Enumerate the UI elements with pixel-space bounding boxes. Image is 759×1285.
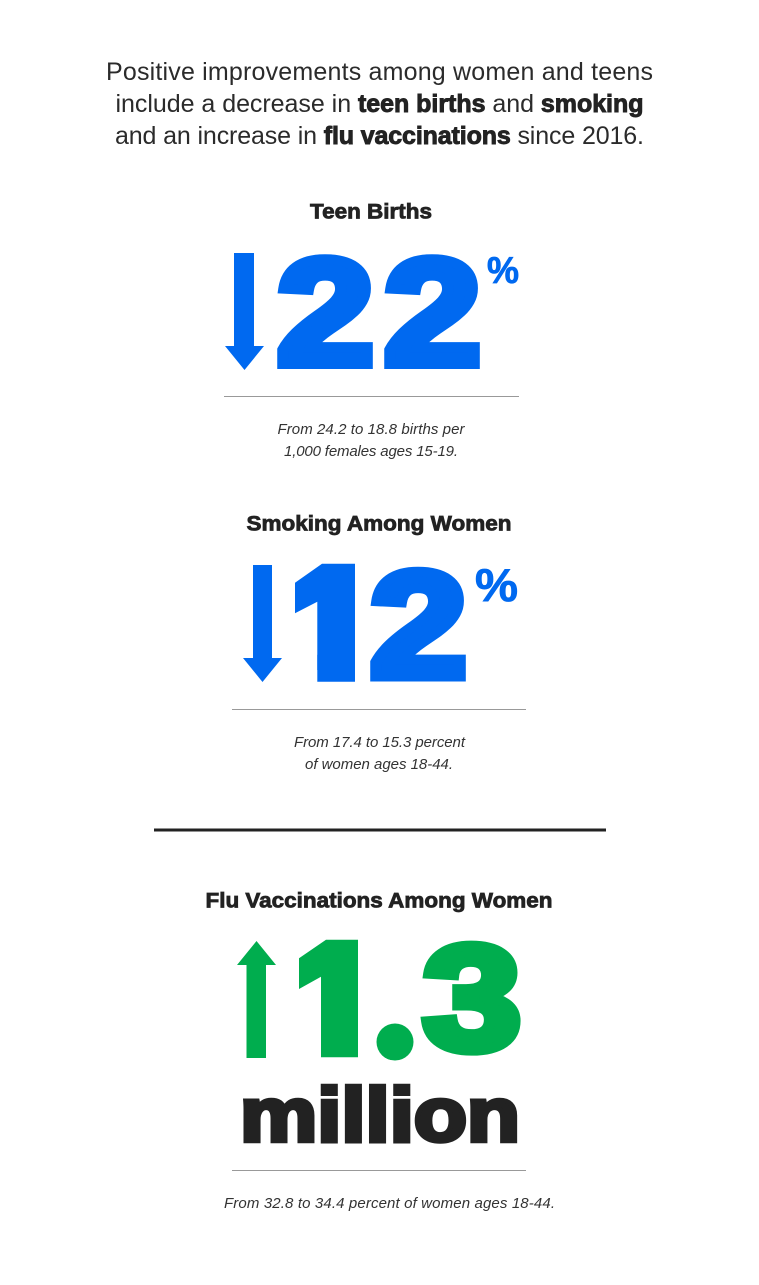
number: 12 percent: % xyxy=(475,559,518,611)
number: 12 percent xyxy=(295,564,518,682)
note: flu vaccinations: From 32.8 to 34.4 percent of women ages 18-44. xyxy=(224,1195,555,1212)
note: smoking: of women ages 18-44. xyxy=(305,756,453,773)
heading: teen births: Teen Births xyxy=(310,200,432,224)
note: smoking: From 17.4 to 15.3 percent xyxy=(294,734,466,751)
note: teen births: From 24.2 to 18.8 births per xyxy=(278,421,466,438)
intro text: and an increase in flu vaccinations since 2016. xyxy=(115,122,644,150)
number: 1.3: 1 xyxy=(299,910,382,1078)
heading: smoking: Smoking Among Women xyxy=(246,512,512,536)
number: 12 percent: 1 xyxy=(295,534,378,702)
number: 1.3: . xyxy=(375,970,403,1082)
icon: down arrow blue xyxy=(225,253,264,370)
number: 12 percent: 2 xyxy=(370,540,467,708)
heading: flu vaccinations: Flu Vaccinations Among Women xyxy=(206,888,552,912)
note: teen births xyxy=(278,421,466,460)
note: teen births: 1,000 females ages 15-19. xyxy=(284,443,458,460)
number: 1.3: 3 xyxy=(423,916,521,1081)
number: 22 percent: % xyxy=(487,250,519,291)
icon: down arrow blue xyxy=(243,565,282,682)
panel: flu vaccinations xyxy=(206,888,555,1212)
intro text: Positive improvements among women and teens xyxy=(106,58,653,86)
number: 22 percent xyxy=(277,228,519,396)
word: million: million xyxy=(240,1073,520,1158)
icon: up arrow green xyxy=(237,941,276,1058)
number: 1.3 xyxy=(299,940,521,1060)
number: 22 percent: 2 xyxy=(277,228,374,396)
number: 22 percent: 2 xyxy=(384,228,481,396)
note: smoking xyxy=(294,734,466,773)
panel: smoking among women xyxy=(232,512,526,773)
intro text xyxy=(106,58,653,150)
panel: teen births xyxy=(224,200,519,460)
intro text: include a decrease in teen births and smoking xyxy=(116,90,644,118)
